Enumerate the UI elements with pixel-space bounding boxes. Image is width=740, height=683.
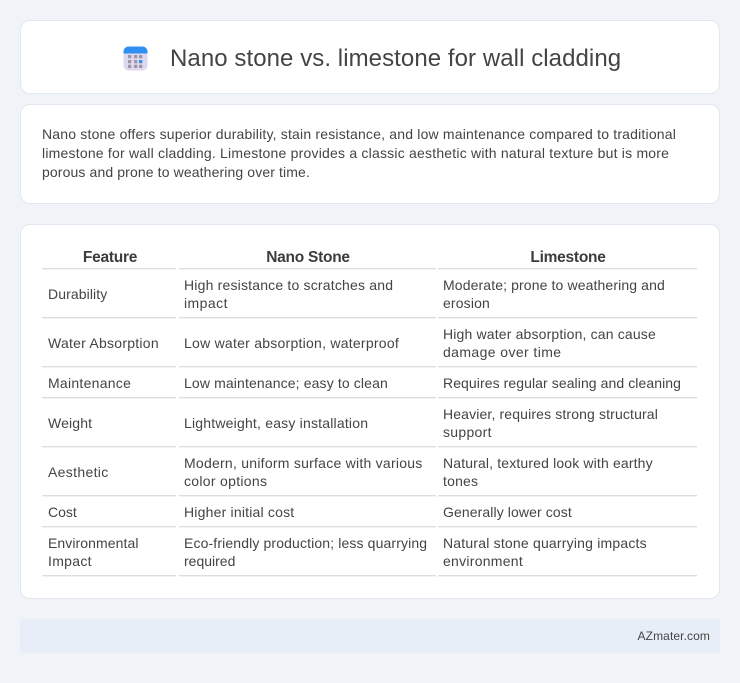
footer bar xyxy=(20,619,720,653)
row: weight: Weight xyxy=(48,415,92,431)
header row: Feature xyxy=(83,249,137,266)
row: durability: Moderate; prone to weathering and xyxy=(443,277,665,293)
row: aesthetic: Modern, uniform surface with various xyxy=(184,455,423,471)
row: water absorption: Water Absorption xyxy=(48,335,159,351)
row: water absorption: Low water absorption, waterproof xyxy=(184,335,399,351)
row: environmental impact: Impact xyxy=(48,553,92,569)
row: maintenance xyxy=(42,375,697,399)
row: durability: High resistance to scratches and xyxy=(184,277,393,293)
row: weight: Lightweight, easy installation xyxy=(184,415,368,431)
row: water absorption xyxy=(42,326,697,368)
row: environmental impact: Environmental xyxy=(48,535,139,551)
row: durability: impact xyxy=(184,295,228,311)
comparison table xyxy=(42,249,697,577)
row: cost: Generally lower cost xyxy=(443,504,572,520)
row: weight: support xyxy=(443,424,492,440)
row: durability: Durability xyxy=(48,286,107,302)
row: cost xyxy=(42,504,697,528)
row: environmental impact: required xyxy=(184,553,235,569)
intro text card xyxy=(20,104,720,204)
row: weight xyxy=(42,406,697,448)
row: maintenance: Low maintenance; easy to clean xyxy=(184,375,388,391)
comparison table card xyxy=(20,224,720,599)
row: maintenance: Requires regular sealing and cleaning xyxy=(443,375,681,391)
row: environmental impact xyxy=(42,535,697,577)
row: aesthetic xyxy=(42,455,697,497)
intro paragraph: porous and prone to weathering over time. xyxy=(42,164,310,180)
icon: calendar xyxy=(124,46,148,70)
header row: Nano Stone xyxy=(266,249,350,266)
intro paragraph xyxy=(42,126,676,180)
footer credit: AZmater.com xyxy=(638,629,710,643)
row: aesthetic: color options xyxy=(184,473,267,489)
title: Nano stone vs. limestone for wall cladding xyxy=(170,45,621,72)
intro paragraph: limestone for wall cladding. Limestone provides a classic aesthetic with natural texture but is more xyxy=(42,145,669,161)
row: environmental impact: Eco-friendly production; less quarrying xyxy=(184,535,427,551)
row: aesthetic: Natural, textured look with earthy xyxy=(443,455,653,471)
row: aesthetic: tones xyxy=(443,473,478,489)
row: water absorption: damage over time xyxy=(443,344,561,360)
row: cost: Cost xyxy=(48,504,77,520)
header row xyxy=(42,249,697,270)
row: environmental impact: Natural stone quarrying impacts xyxy=(443,535,647,551)
header row: Limestone xyxy=(530,249,606,266)
row: durability xyxy=(42,277,697,319)
row: aesthetic: Aesthetic xyxy=(48,464,109,480)
row: environmental impact: environment xyxy=(443,553,523,569)
title card xyxy=(20,20,720,94)
row: durability: erosion xyxy=(443,295,490,311)
row: cost: Higher initial cost xyxy=(184,504,294,520)
row: weight: Heavier, requires strong structural xyxy=(443,406,658,422)
intro paragraph: Nano stone offers superior durability, stain resistance, and low maintenance compared to traditional xyxy=(42,126,676,142)
row: water absorption: High water absorption, can cause xyxy=(443,326,656,342)
row: maintenance: Maintenance xyxy=(48,375,131,391)
